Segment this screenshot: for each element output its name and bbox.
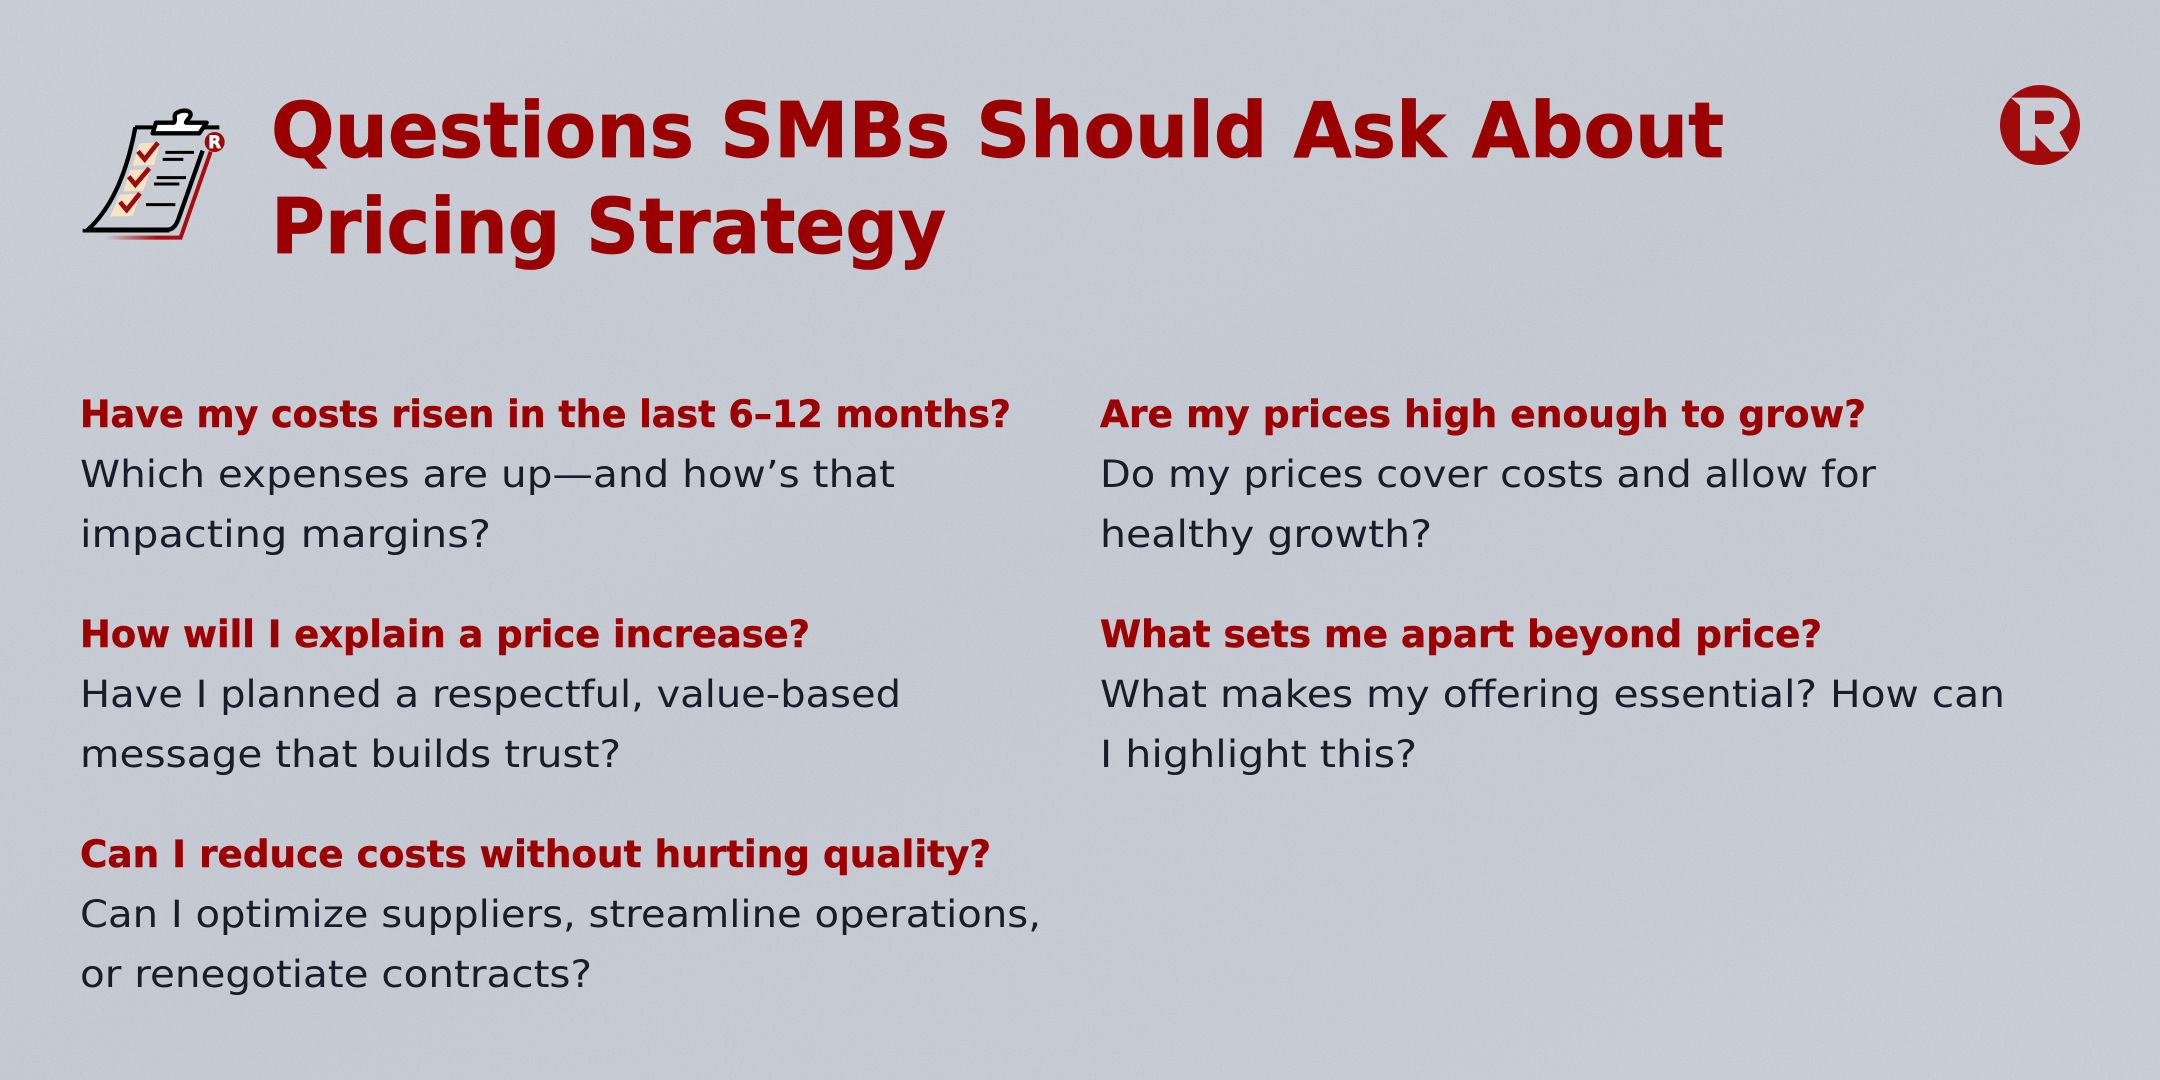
heading: Are my prices high enough to grow? (1100, 392, 1866, 436)
title: Pricing Strategy (271, 183, 946, 272)
body text: I highlight this? (1100, 732, 1417, 776)
body text: Can I optimize suppliers, streamline operations, (80, 892, 1041, 936)
body text: or renegotiate contracts? (80, 952, 592, 996)
heading: Can I reduce costs without hurting quality? (80, 832, 991, 876)
title: Questions SMBs Should Ask About (271, 87, 1724, 176)
question: beyond price (1100, 612, 2005, 776)
question: explain a price increase (80, 612, 901, 776)
body text: What makes my offering essential? How can (1100, 672, 2005, 716)
heading: Have my costs risen in the last 6–12 months? (80, 392, 1011, 436)
question: reduce costs (80, 832, 1041, 996)
body text (80, 672, 901, 776)
icon: clipboard checklist: R (208, 133, 221, 152)
question: costs risen (80, 392, 1011, 556)
body text (1100, 672, 2005, 776)
icon: clipboard checklist (83, 111, 225, 239)
body text: Do my prices cover costs and allow for (1100, 452, 1877, 496)
body text: Which expenses are up—and how’s that (80, 452, 895, 496)
icon: brand logo (2000, 85, 2080, 165)
body text: Have I planned a respectful, value-based (80, 672, 901, 716)
body text (1100, 452, 1877, 556)
title (271, 87, 1724, 272)
heading: How will I explain a price increase? (80, 612, 810, 656)
body text (80, 452, 895, 556)
body text (80, 892, 1041, 996)
body text: message that builds trust? (80, 732, 621, 776)
question: prices high enough (1100, 392, 1877, 556)
body text: healthy growth? (1100, 512, 1432, 556)
body text: impacting margins? (80, 512, 491, 556)
heading: What sets me apart beyond price? (1100, 612, 1822, 656)
